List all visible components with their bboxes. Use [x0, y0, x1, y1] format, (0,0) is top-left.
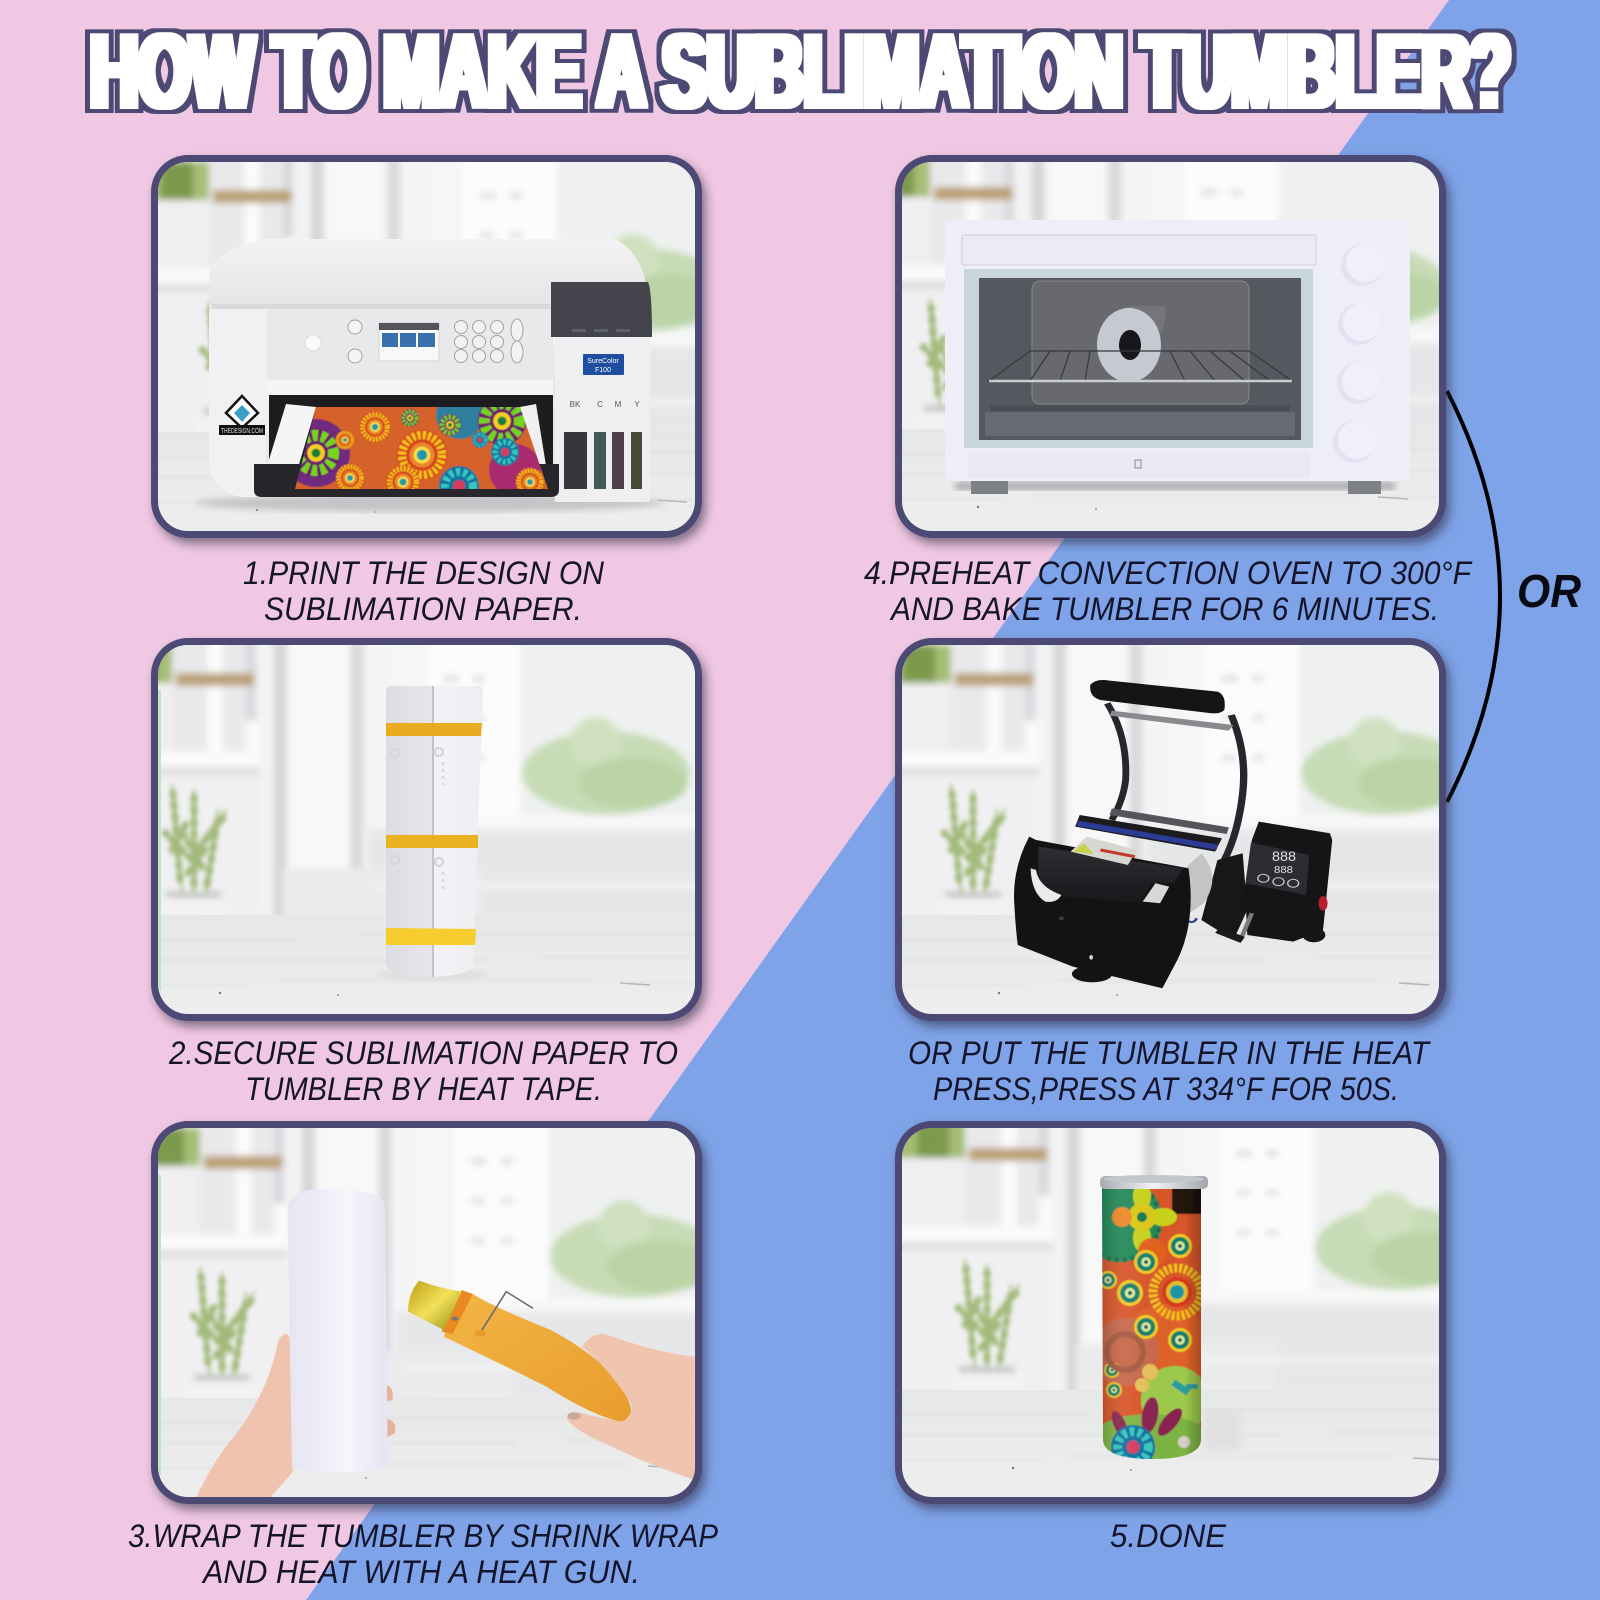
- caption: heat press option: OR PUT THE TUMBLER IN THE HEAT: [908, 1035, 1431, 1071]
- logo sticker: [219, 396, 265, 435]
- label: OR: OR: [1517, 565, 1581, 617]
- caption: step 3: AND HEAT WITH A HEAT GUN.: [201, 1554, 640, 1590]
- caption: step 5: 5.DONE: [1110, 1518, 1227, 1554]
- press display digits: 888: [1274, 865, 1293, 876]
- ink tanks: C: [597, 400, 603, 409]
- ink tanks: BK: [570, 400, 581, 409]
- heat press machine: [1014, 680, 1332, 988]
- photo: finished tumbler on table: [902, 1128, 1439, 1497]
- right hand: [566, 1334, 695, 1480]
- wrapped tumbler: [386, 686, 483, 977]
- panel: heat press option: [892, 636, 1457, 1034]
- frame: [151, 1121, 702, 1504]
- ink tanks: M: [615, 400, 622, 409]
- frame: [151, 638, 702, 1021]
- panel: step 2 paper taped to tumbler: [148, 636, 714, 1034]
- caption: heat press option: [908, 1035, 1431, 1107]
- model badge: SureColor: [587, 358, 619, 365]
- oven: [945, 220, 1410, 494]
- logo sticker: THEDESIGN.COM: [221, 428, 263, 435]
- photo: oven on table: [902, 162, 1439, 531]
- caption: step 4: 4.PREHEAT CONVECTION OVEN TO 300°F: [864, 555, 1473, 591]
- caption: step 2: [168, 1035, 678, 1107]
- caption: step 4: AND BAKE TUMBLER FOR 6 MINUTES.: [889, 591, 1439, 627]
- press display digits: [1272, 852, 1296, 873]
- press display digits: 888: [1272, 848, 1296, 864]
- panel: step 3 shrink wrap and heat gun: [148, 1120, 713, 1518]
- arc connecting the oven and heat press options: [1447, 391, 1500, 802]
- caption: step 1: [243, 555, 605, 627]
- heat gun: [408, 1281, 631, 1422]
- frame: [895, 638, 1446, 1021]
- left hand: [196, 1334, 293, 1498]
- panel: step 4 convection oven: [892, 154, 1457, 552]
- caption: heat press option: PRESS,PRESS AT 334°F FOR 50S.: [933, 1071, 1399, 1107]
- caption: step 1: 1.PRINT THE DESIGN ON: [243, 555, 605, 591]
- panel: step 5 finished tumbler: [892, 1120, 1457, 1517]
- frame: [895, 1121, 1446, 1504]
- tumbler inside oven: [1097, 306, 1166, 382]
- photo: heat press on table: [902, 645, 1439, 1014]
- caption: step 2: TUMBLER BY HEAT TAPE.: [245, 1071, 602, 1107]
- photo: tumbler wrapped in paper: [158, 645, 695, 1014]
- model badge: [583, 354, 624, 375]
- wrapped tumbler: [287, 1189, 388, 1472]
- caption: step 3: 3.WRAP THE TUMBLER BY SHRINK WRAP: [128, 1518, 719, 1554]
- caption: step 4: [864, 555, 1473, 627]
- caption: step 3: [128, 1518, 719, 1590]
- model badge: F100: [595, 367, 611, 374]
- photo: printer on table: [158, 162, 695, 531]
- caption: step 2: 2.SECURE SUBLIMATION PAPER TO: [168, 1035, 678, 1071]
- photo: hands with tumbler and heat gun: [158, 1128, 695, 1497]
- ink tanks: [564, 400, 642, 489]
- frame: [151, 155, 702, 538]
- caption: step 1: SUBLIMATION PAPER.: [264, 591, 582, 627]
- panel: step 1 printer: [148, 154, 714, 552]
- colourful tumbler: [1100, 1175, 1208, 1459]
- printer control panel: [305, 319, 523, 363]
- ink tanks: Y: [634, 400, 640, 409]
- frame: [895, 155, 1446, 538]
